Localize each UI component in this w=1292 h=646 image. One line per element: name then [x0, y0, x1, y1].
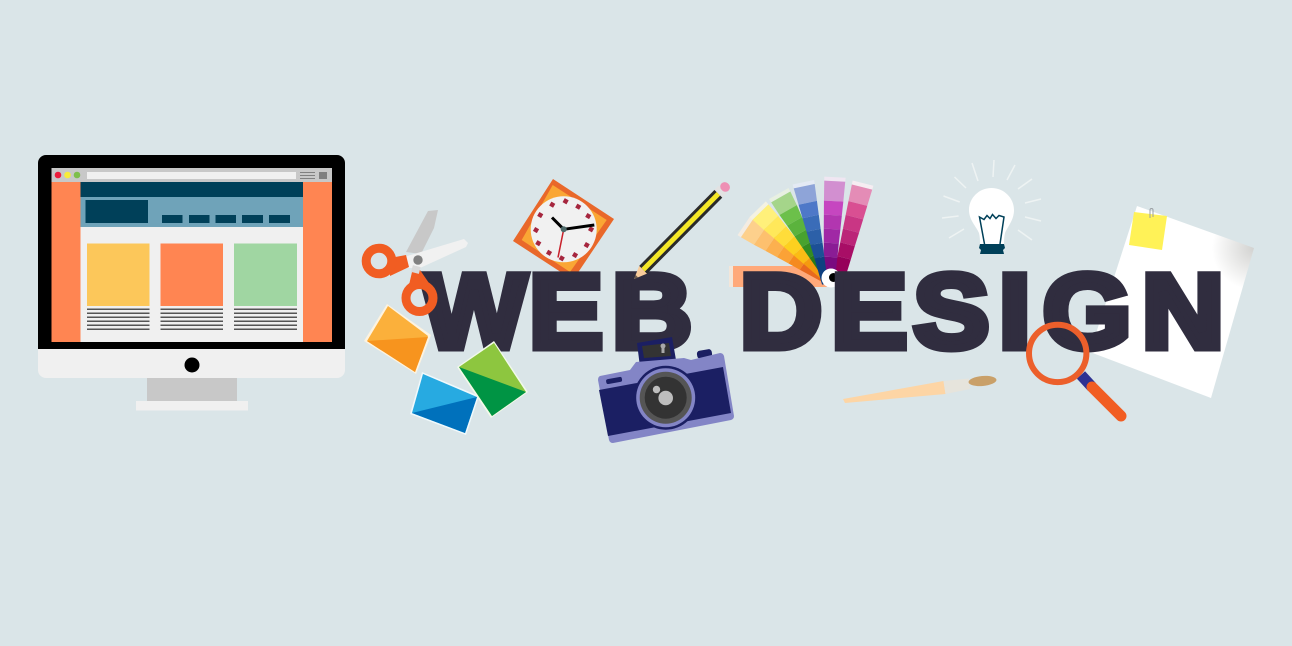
title: DESIGN: DESIGN	[740, 253, 1224, 371]
fan blade: yellow	[750, 201, 838, 292]
sticky note	[1129, 212, 1167, 250]
icon: colour swatch fan	[738, 177, 873, 293]
icon: green photo	[457, 341, 528, 418]
fan blade: green	[769, 188, 840, 290]
icon: orange photo	[364, 304, 431, 374]
icon: sheet of paper with sticky note	[1090, 206, 1254, 398]
icon: light bulb with rays	[942, 160, 1041, 254]
icon: camera	[598, 337, 734, 443]
paper clip	[1150, 208, 1153, 218]
fan rivet	[822, 268, 840, 288]
icon: blue photo	[410, 372, 479, 435]
fan blade: blue	[793, 180, 836, 286]
fan blade: purple	[818, 177, 846, 285]
icon: pencil	[630, 180, 732, 283]
title: WEB: WEB	[422, 253, 692, 370]
icon: wall clock	[513, 179, 614, 280]
fan blade: pink	[827, 181, 873, 287]
fan blade: orange	[738, 217, 836, 293]
icon: magnifying glass	[1029, 325, 1121, 416]
icon: scissors	[366, 210, 468, 312]
icon: desktop monitor with web page layout	[38, 155, 345, 410]
icon: paint brush	[843, 375, 997, 403]
icon: orange swatch base	[729, 266, 827, 287]
